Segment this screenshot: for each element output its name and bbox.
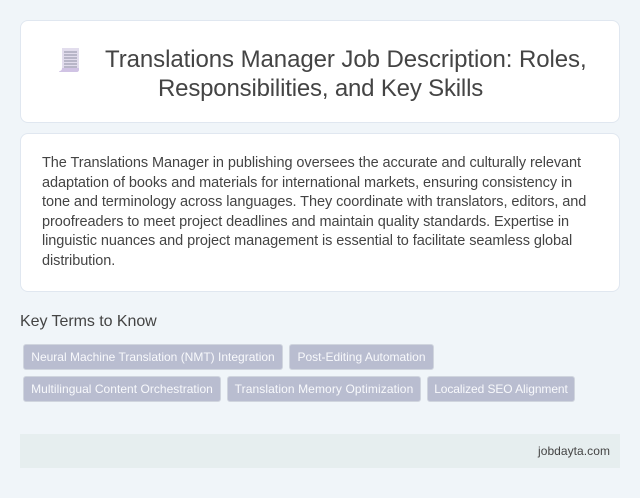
description text: distribution. <box>42 252 115 268</box>
tag: NMT integration <box>23 344 283 370</box>
description text: proofreaders to meet project deadlines and maintain quality standards. Expertise in <box>42 214 569 230</box>
tag: localized SEO alignment: Localized SEO Alignment <box>434 382 568 396</box>
tag: NMT integration: Neural Machine Translation (NMT) Integration <box>31 350 275 364</box>
description text <box>42 155 586 268</box>
tag: translation memory optimization <box>227 376 421 402</box>
description text: adaptation of books and materials for international markets, ensuring consistency in <box>42 174 572 190</box>
tag: localized SEO alignment <box>427 376 575 402</box>
title line 2: Responsibilities, and Key Skills <box>158 75 483 102</box>
panel: title card <box>20 20 620 123</box>
description text: The Translations Manager in publishing oversees the accurate and culturally relevant <box>42 155 581 171</box>
panel: description <box>20 133 620 292</box>
tag: post-editing automation <box>289 344 434 370</box>
title line 1: Translations Manager Job Description: Roles, <box>105 46 587 73</box>
footer source text: jobdayta.com <box>538 444 610 458</box>
tag: multilingual content orchestration: Multilingual Content Orchestration <box>31 382 213 396</box>
tag: post-editing automation: Post-Editing Automation <box>297 350 426 364</box>
footer bar <box>20 434 620 468</box>
description text: linguistic nuances and project management is essential to facilitate seamless global <box>42 233 572 249</box>
icon: document scroll <box>59 48 79 72</box>
tag: multilingual content orchestration <box>23 376 221 402</box>
description text: tone and terminology across languages. They coordinate with translators, editors, and <box>42 194 586 210</box>
tag: translation memory optimization: Translation Memory Optimization <box>235 382 413 396</box>
heading: key terms: Key Terms to Know <box>20 313 157 330</box>
